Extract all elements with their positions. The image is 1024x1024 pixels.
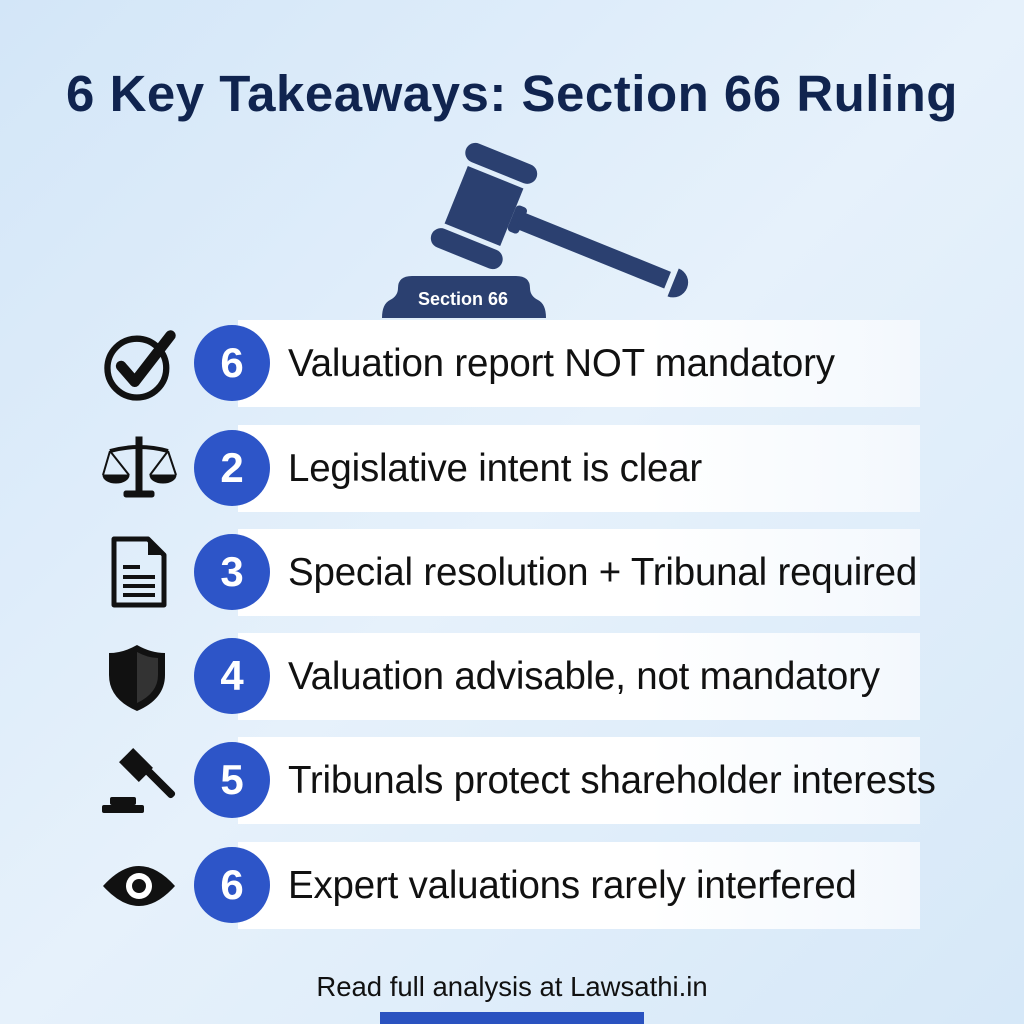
icon: scales [102,436,177,498]
icon: small gavel [102,748,176,813]
row 3: Special resolution + Tribunal required [288,551,917,594]
icon: check circle [104,330,176,401]
row 5: Tribunals protect shareholder interests [288,759,936,802]
row 1: Valuation report NOT mandatory [288,342,835,385]
row 1 [104,320,920,407]
title: 6 Key Takeaways: Section 66 Ruling [66,65,958,122]
row 1: 6 [220,339,244,386]
row 3 [112,529,920,616]
row 4: 4 [220,652,244,699]
icon: shield [109,645,165,711]
row 2: 2 [220,444,244,491]
row 4 [109,633,920,720]
row 5 [102,737,936,824]
row 3: 3 [220,548,244,595]
icon: eye [103,866,175,906]
icon: document [112,536,166,608]
footer bar [380,1012,644,1024]
row 2: Legislative intent is clear [288,447,702,490]
row 6: Expert valuations rarely interfered [288,864,857,907]
row 4: Valuation advisable, not mandatory [288,655,880,698]
row 2 [102,425,920,512]
row 6 [103,842,920,929]
icon: gavel with Section 66 base: Section 66 [418,289,508,309]
footer text: Read full analysis at Lawsathi.in [316,971,708,1002]
row 5: 5 [220,756,244,803]
row 6: 6 [220,861,244,908]
icon: gavel with Section 66 base [382,142,688,318]
